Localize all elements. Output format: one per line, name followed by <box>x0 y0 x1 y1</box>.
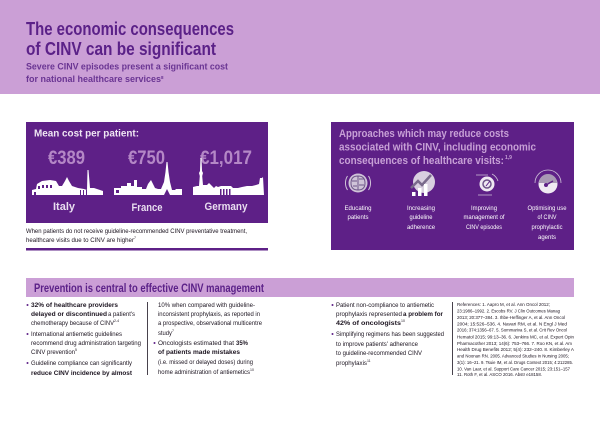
text column 3: prophylaxis <box>336 360 367 367</box>
text column 2: Oncologists estimated that <box>158 340 234 347</box>
label: increasing guideline adherence: adherence <box>407 225 436 231</box>
text column 1: delayed or discontinued <box>31 311 107 318</box>
panel heading: mean cost: Mean cost per patient: <box>34 128 139 140</box>
label: increasing guideline adherence <box>407 206 436 231</box>
label: improving management: management of <box>464 215 505 221</box>
references: 2016; 374:1356–67. 5. Sommariva S, et al. Crit Rev Oncol <box>457 328 567 334</box>
section heading: prevention: Prevention is central to effective CINV management <box>34 283 264 295</box>
label: optimising use: of CINV <box>538 215 556 221</box>
label: educating patients <box>344 206 372 221</box>
icon: gauge <box>476 174 498 195</box>
subtitle <box>26 62 229 85</box>
icon: rising chart <box>411 171 435 196</box>
references: Hematol 2015; 99:13–36. 6. Jenkins MC, et al. Expert Opin <box>457 334 574 340</box>
text column 2: inconsistent prophylaxis, as reported in <box>158 311 260 318</box>
text column 2 <box>154 302 262 376</box>
text column 2: a prospective, observational multicentre <box>158 320 262 327</box>
text column 1: CINV prevention <box>31 349 75 356</box>
text column 1: Guideline compliance can significantly <box>31 360 133 367</box>
title: The economic consequences <box>26 19 234 39</box>
text column 1: 32% of healthcare providers <box>31 302 119 309</box>
caption: guideline note <box>26 228 247 244</box>
references: 23:1986–1992. 2. Escobs RV. J Clin Outcomes Manag <box>457 308 560 314</box>
panel: approaches to reduce costs <box>331 122 574 250</box>
text column 1: recommend drug administration targeting <box>31 340 141 347</box>
skyline: Germany <box>193 158 264 195</box>
references: Pharmacother 2013; 14(6): 753–766. 7. Roo KN, et al. Am <box>457 341 572 347</box>
section heading: prevention <box>26 278 574 297</box>
cost: Germany: €1,017 <box>200 148 252 169</box>
text column 3: prophylaxis represented <box>336 311 402 318</box>
label: educating patients: patients <box>348 215 368 221</box>
icon: brain <box>345 174 371 192</box>
references: 10. Van Laar, et al. Support Care Cancer 2015; 23:151–157 <box>457 366 570 372</box>
caption: guideline note: When patients do not receive guideline-recommended CINV preventative treatment, <box>26 228 247 235</box>
caption: guideline note: 7 <box>134 236 136 240</box>
panel heading: approaches <box>339 128 536 167</box>
label: improving management <box>464 206 505 231</box>
text column 2: (i.e. missed or delayed doses) during <box>158 359 253 366</box>
label: increasing guideline adherence: Increasing <box>407 206 435 212</box>
text column 3: 10 <box>401 319 405 323</box>
references <box>457 302 575 378</box>
panel heading: approaches: consequences of healthcare visits: <box>339 155 504 167</box>
text column 1: reduce CINV incidence by almost <box>31 370 133 377</box>
references: Health Drug Benefits 2012; 5(4): 232–240. 8. Kimberley A <box>457 347 575 353</box>
subtitle: for national healthcare services <box>26 74 161 85</box>
label: optimising use: prophylactic <box>532 225 562 231</box>
references: 2013; 20:377–384. 3. Ihbe-Heffinger A, et al. Ann Oncol <box>457 315 565 321</box>
text column 3: Simplifying regimens has been suggested <box>336 331 444 338</box>
label: France: France <box>132 202 162 214</box>
title <box>26 19 234 59</box>
references: 3(1): 16–21. 9. Tsuie IM, et al. Drugs Context 2015; 4:212285. <box>457 360 573 366</box>
label: optimising use: Optimising use <box>528 206 567 212</box>
label: increasing guideline adherence: guideline <box>410 215 433 221</box>
title: of CINV can be significant <box>26 39 216 59</box>
cost: Italy: €389 <box>48 148 85 169</box>
text column 1: 5 <box>75 348 77 352</box>
panel heading: approaches: 1,9 <box>505 155 512 161</box>
label: Germany: Germany <box>204 201 248 213</box>
references: 2004; 15:526–536. 4. Navari RM, et al. N Engl J Med <box>457 321 567 327</box>
text column 1: chemotherapy because of CINV <box>31 320 115 327</box>
label: optimising use <box>528 206 567 241</box>
label: improving management: CINV episodes <box>466 225 502 231</box>
references: and Noonan RN. 2005. Advanced Studies in Nursing 2005; <box>457 354 569 360</box>
panel: mean cost per patient <box>26 122 268 223</box>
text column 3 <box>332 302 444 367</box>
icon: dial <box>535 170 561 194</box>
text column 2: study <box>158 330 173 337</box>
panel heading: approaches: Approaches which may reduce costs <box>339 128 509 140</box>
text column 2: of patients made mistakes <box>158 349 241 356</box>
skyline: France <box>114 162 182 195</box>
text column 1: International antiemetic guidelines <box>31 331 122 338</box>
text column 3: to improve patients' adherence <box>336 341 418 348</box>
references: References: 1. Aapro M, et al. Ann Oncol 2012; <box>457 302 550 308</box>
text column 1 <box>26 302 141 377</box>
text column 2: 10% when compared with guideline- <box>158 302 255 309</box>
label: educating patients: Educating <box>344 206 372 212</box>
header band <box>0 0 600 94</box>
references: 11. Roth F, et al. ASCO 2016. Abstr e18158. <box>457 372 542 378</box>
subtitle: Severe CINV episodes present a significant cost <box>26 62 229 72</box>
panel heading: approaches: associated with CINV, including economic <box>339 142 536 154</box>
text column 2: 7 <box>172 329 174 333</box>
label: optimising use: agents <box>538 235 556 241</box>
text column 3: 11 <box>367 359 371 363</box>
text column 2: home administration of antiemetics <box>158 369 250 376</box>
cost: France: €750 <box>128 148 165 169</box>
text column 2: 10 <box>250 368 254 372</box>
text column 3: a problem for <box>403 311 444 318</box>
skyline: Italy <box>32 170 103 195</box>
caption: guideline note: healthcare visits due to CINV are higher <box>26 237 134 244</box>
label: improving management: Improving <box>471 206 497 212</box>
label: Italy: Italy <box>53 201 76 213</box>
text column 2: 35% <box>236 340 248 347</box>
subtitle: 8 <box>161 75 164 80</box>
text column 1: 2-4 <box>114 319 119 323</box>
text column 3: Patient non-compliance to antiemetic <box>336 302 434 309</box>
text column 1: a patient's <box>108 311 135 318</box>
text column 3: 42% of oncologists <box>336 320 402 327</box>
text column 3: to guideline-recommended CINV <box>336 350 423 357</box>
